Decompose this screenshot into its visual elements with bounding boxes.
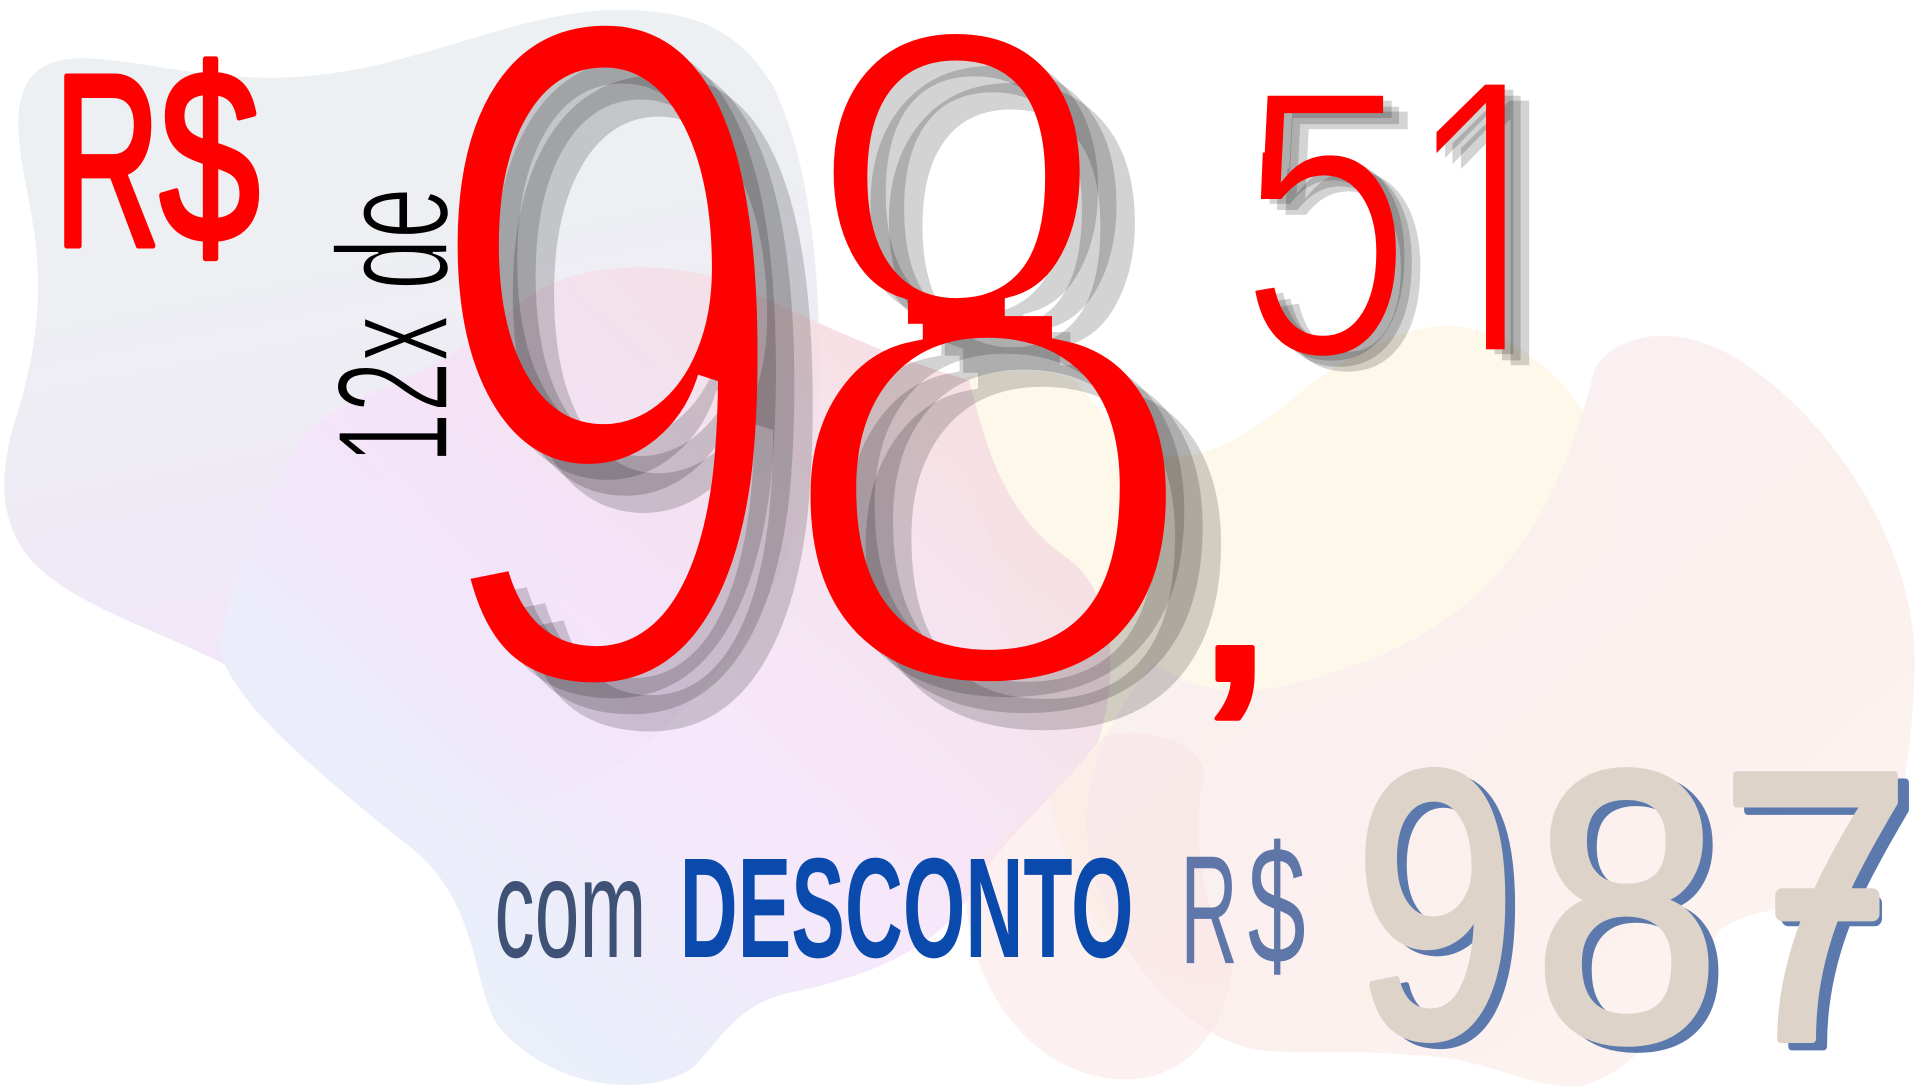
currency symbol R$: $ — [159, 19, 260, 294]
currency symbol R$ — [54, 19, 260, 298]
text: R$ small: R — [1180, 825, 1238, 997]
cents shadows: 51: 5 — [1245, 10, 1423, 446]
cents shadows: 51: 1 — [1426, 0, 1603, 503]
decimal comma: , — [1185, 406, 1284, 745]
text: DESCONTO: DESCONTO — [680, 829, 1134, 988]
text: com: com — [494, 830, 646, 988]
background blob: right peach — [1087, 336, 1915, 1086]
text: R$ small — [1180, 810, 1306, 999]
cents shadows: 51: 1 — [1417, 0, 1594, 498]
cents: 51: 5 — [1237, 5, 1414, 441]
background blob: cream — [963, 326, 1622, 981]
label: 12x de: 12x de — [303, 188, 482, 464]
main price: 98 — [458, 26, 1166, 682]
discounted price shadow: 987 — [1364, 698, 1920, 1087]
cents shadows: 51: 1 — [1410, 0, 1587, 492]
cents shadows: 51 — [1270, 90, 1530, 372]
cents: 51 — [1255, 84, 1505, 356]
discounted price: 987 — [1354, 692, 1912, 1087]
background blob: top left — [4, 10, 820, 810]
cents shadows: 51: 5 — [1261, 21, 1439, 457]
main price shadows: 98 — [498, 60, 1221, 732]
background blob: lower left — [221, 267, 1111, 1085]
background blob: centre pink — [965, 733, 1233, 1079]
currency symbol R$: R — [54, 23, 160, 298]
cents shadows: 51: 5 — [1253, 16, 1430, 452]
text: R$ small: $ — [1248, 810, 1306, 999]
